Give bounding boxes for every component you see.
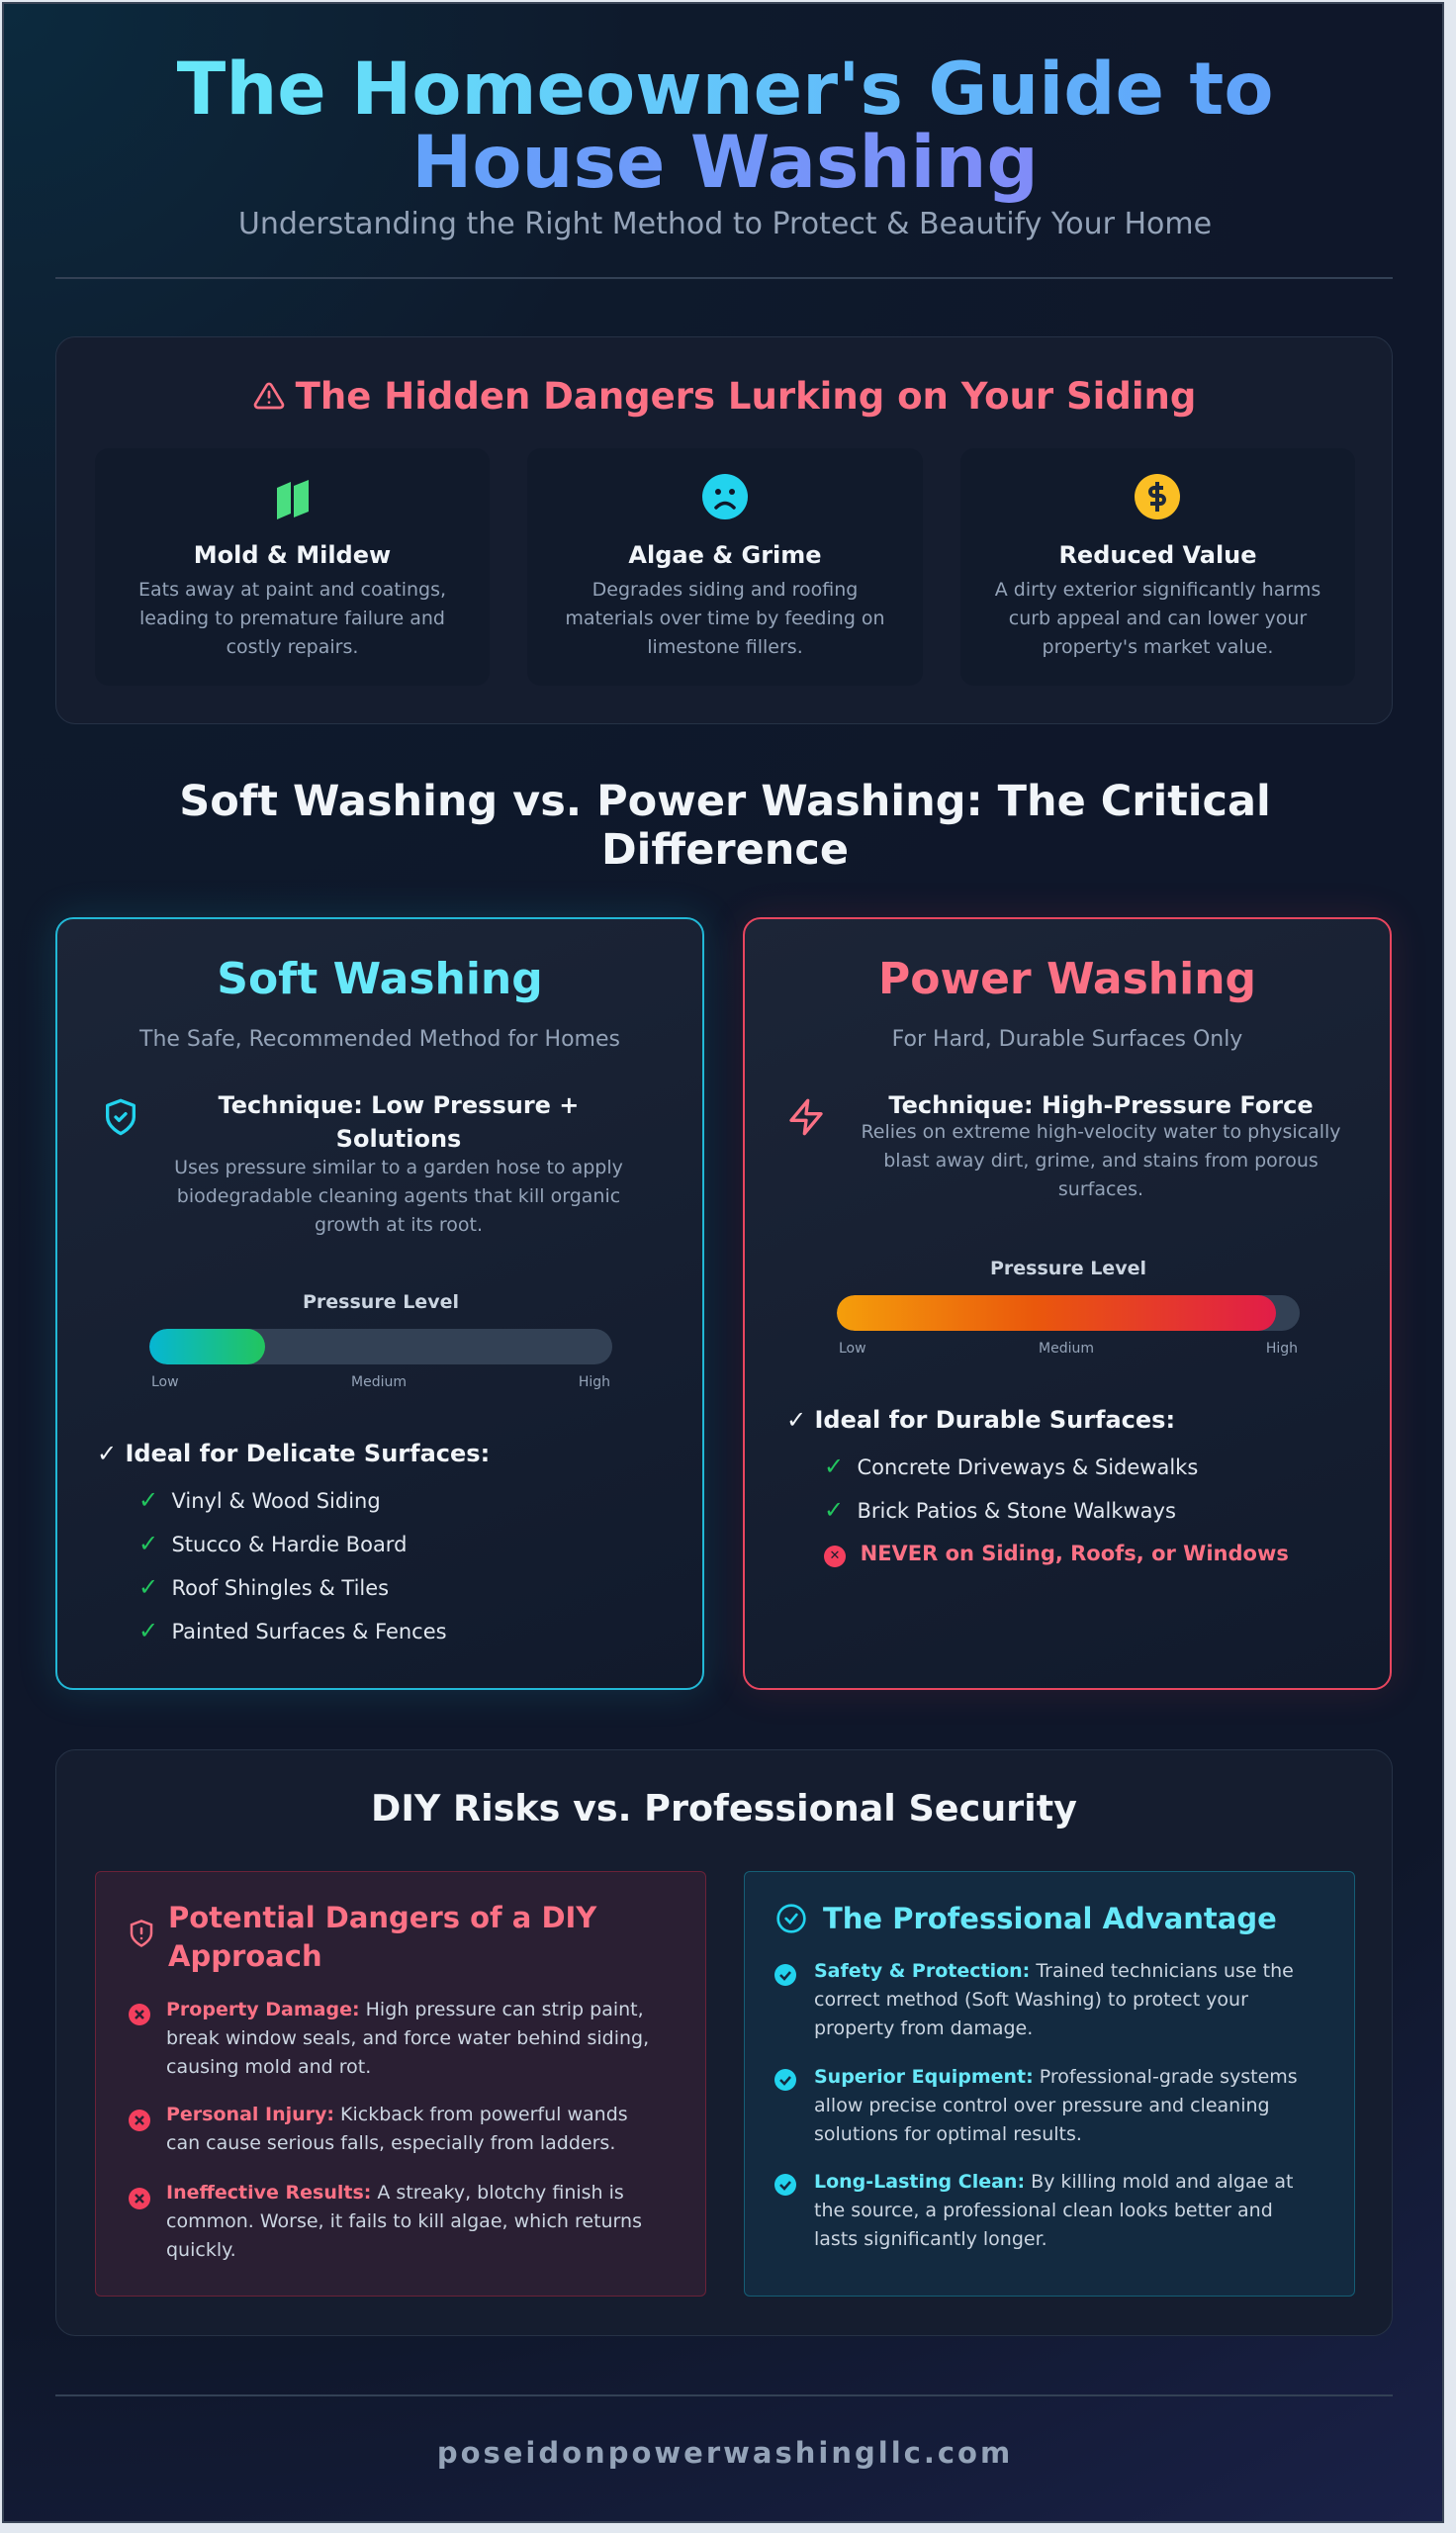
list: delicate surfaces: ✓ Vinyl & Wood Siding [138, 1486, 381, 1514]
panel: soft washing [55, 917, 704, 1690]
box: professional advantage: Safety & Protection: Trained technicians use the correct method (Soft Washing) to protect your property from damage. [814, 1960, 1294, 2039]
icon: mold [277, 480, 309, 519]
title: House Washing [411, 121, 1039, 205]
pressure gauge: low: High [579, 1374, 610, 1390]
pressure gauge: low: Pressure Level [303, 1291, 459, 1313]
box: professional advantage: Long-Lasting Clean: By killing mold and algae at the source, a professional clean looks better and lasts significantly longer. [814, 2171, 1293, 2250]
pressure gauge: high: Low [839, 1341, 866, 1357]
technique text: Technique: High-Pressure Force [888, 1091, 1314, 1119]
card: mold: Mold & Mildew [194, 541, 391, 569]
box: DIY dangers [95, 1871, 706, 2297]
technique text: Relies on extreme high-velocity water to physically blast away dirt, grime, and stains from porous surfaces. [861, 1121, 1341, 1200]
card: mold [95, 448, 490, 686]
box: professional advantage: Superior Equipment: Professional-grade systems allow precise control over pressure and cleaning solutions for optimal results. [814, 2066, 1298, 2145]
list: delicate surfaces: ✓ Roof Shingles & Tiles [138, 1573, 389, 1601]
pressure gauge: high: Pressure Level [990, 1258, 1146, 1279]
list: durable surfaces: ✕ [830, 1548, 840, 1563]
panel: soft washing: The Safe, Recommended Method for Homes [139, 1027, 620, 1052]
title [177, 47, 1273, 205]
card: algae: Degrades siding and roofing materials over time by feeding on limestone fillers. [565, 579, 885, 658]
card: mold: Eats away at paint and coatings, leading to premature failure and costly repairs. [138, 579, 446, 658]
icon: sad face [702, 474, 748, 519]
heading: DIY vs pro: DIY Risks vs. Professional Security [371, 1787, 1077, 1829]
list: delicate surfaces [97, 1440, 490, 1644]
list: durable surfaces: ✓ Ideal for Durable Surfaces: [786, 1406, 1175, 1434]
icon: shield [106, 1098, 136, 1136]
box: professional advantage: The Professional Advantage [823, 1902, 1277, 1935]
box: DIY dangers: Property Damage: High pressure can strip paint, break window seals, and force water behind siding, causing mold and rot. [166, 1999, 649, 2078]
panel: DIY vs professional [55, 1749, 1393, 2336]
heading: hidden dangers: The Hidden Dangers Lurking on Your Siding [296, 375, 1196, 418]
list: delicate surfaces: ✓ Painted Surfaces & Fences [138, 1617, 447, 1644]
box: DIY dangers: Potential Dangers of a DIY Approach [168, 1901, 596, 1973]
title: The Homeowner's Guide to [177, 47, 1273, 132]
icon: shield alert [131, 1920, 152, 1947]
pressure gauge: high: High [1266, 1341, 1298, 1357]
technique text: Technique: Low Pressure + Solutions [219, 1091, 579, 1153]
technique text [174, 1091, 623, 1236]
box: professional advantage [744, 1871, 1355, 2297]
card: reduced value: Reduced Value [1058, 541, 1257, 569]
pressure gauge: high: Medium [1039, 1341, 1094, 1357]
icon: check circle [776, 1904, 806, 1933]
footer: website: poseidonpowerwashingllc.com [437, 2436, 1013, 2470]
technique text: Uses pressure similar to a garden hose to apply biodegradable cleaning agents that kill organic growth at its root. [174, 1157, 623, 1236]
pressure gauge: low [149, 1291, 612, 1390]
card: reduced value [960, 448, 1355, 686]
list: durable surfaces: ✓ Concrete Driveways & Sidewalks [824, 1453, 1198, 1480]
panel: power washing: For Hard, Durable Surfaces Only [892, 1027, 1242, 1052]
panel: hidden dangers [55, 336, 1393, 724]
soft title: Soft Washing [217, 954, 543, 1004]
heading: comparison: Soft Washing vs. Power Washing: The Critical Difference [179, 777, 1271, 875]
pressure gauge: high [837, 1258, 1300, 1357]
list: durable surfaces: NEVER on Siding, Roofs, or Windows [861, 1542, 1289, 1565]
card: algae [527, 448, 923, 686]
list: durable surfaces [786, 1406, 1289, 1567]
box: DIY dangers: Personal Injury: Kickback from powerful wands can cause serious falls, especially from ladders. [166, 2104, 628, 2154]
panel: power washing [743, 917, 1392, 1690]
subtitle: Understanding the Right Method to Protect & Beautify Your Home [238, 207, 1212, 241]
card: algae: Algae & Grime [628, 541, 822, 569]
icon: coin [1135, 474, 1180, 519]
icon: lightning [789, 1098, 823, 1136]
list: durable surfaces: ✓ Brick Patios & Stone Walkways [824, 1496, 1176, 1524]
card: reduced value: A dirty exterior significantly harms curb appeal and can lower your property's market value. [995, 579, 1320, 658]
box: DIY dangers: Ineffective Results: A streaky, blotchy finish is common. Worse, it fails to kill algae, which returns quickly. [166, 2182, 642, 2261]
list: delicate surfaces: ✓ Ideal for Delicate Surfaces: [97, 1440, 490, 1467]
power title: Power Washing [878, 954, 1256, 1004]
pressure gauge: low: Medium [351, 1374, 407, 1390]
list: delicate surfaces: ✓ Stucco & Hardie Board [138, 1530, 407, 1557]
pressure gauge: low: Low [151, 1374, 179, 1390]
